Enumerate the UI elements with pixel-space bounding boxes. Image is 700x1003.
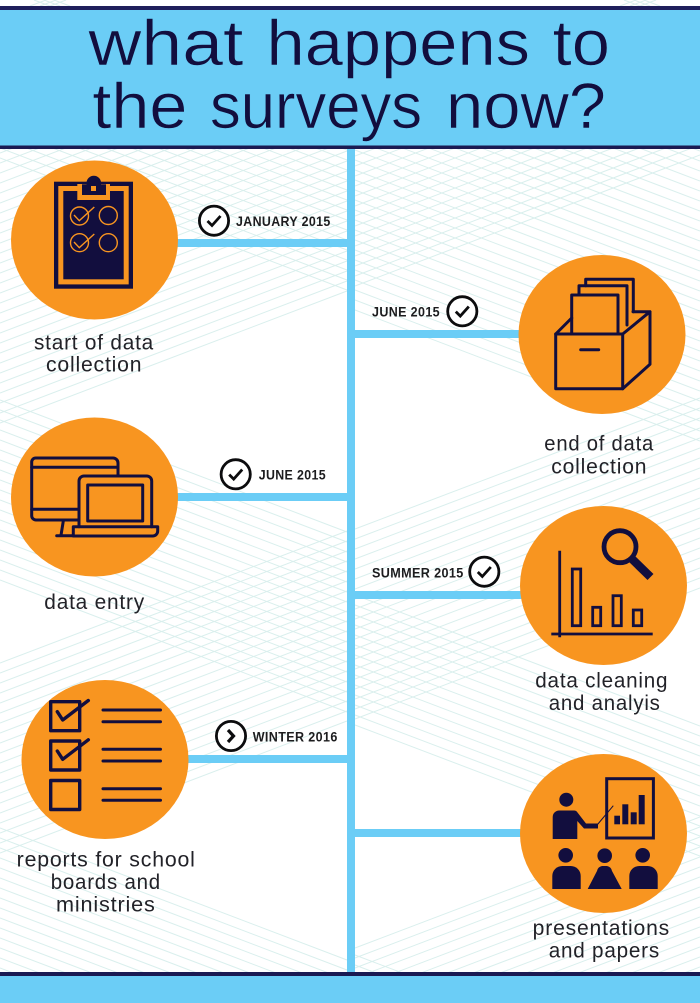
step: data cleaning and analysis	[520, 506, 687, 715]
title: to	[553, 7, 610, 79]
label	[533, 917, 670, 962]
label: end of data	[544, 433, 654, 456]
label: and analyis	[549, 692, 661, 715]
title banner	[0, 6, 700, 149]
label: collection	[46, 354, 142, 377]
icon: desktop and laptop	[32, 458, 158, 536]
step: data entry	[11, 418, 178, 614]
date: June 2015 right	[372, 297, 477, 326]
date: June 2015 right: JUNE 2015	[372, 305, 440, 320]
icon: file box	[556, 279, 650, 389]
date: June 2015 left	[221, 460, 326, 489]
title	[87, 7, 610, 142]
label: data entry	[44, 591, 145, 614]
step: reports for school boards and ministries	[17, 680, 196, 917]
label: start of data	[34, 331, 154, 354]
title: what	[87, 7, 244, 79]
label	[535, 669, 668, 715]
icon: checklist	[51, 700, 161, 810]
date: January 2015	[199, 206, 331, 235]
label: data cleaning	[535, 669, 668, 692]
label: boards and	[51, 871, 161, 894]
label: collection	[551, 455, 647, 478]
label: presentations	[533, 917, 670, 940]
date: June 2015 left: JUNE 2015	[259, 467, 326, 482]
title: happens	[266, 7, 530, 79]
title: surveys	[210, 70, 422, 142]
title: the	[92, 70, 187, 142]
date: Winter 2016: WINTER 2016	[253, 729, 338, 744]
step: start of data collection	[11, 160, 178, 377]
label	[17, 849, 196, 917]
label: reports for school	[17, 849, 196, 872]
label	[34, 331, 154, 377]
icon: bar chart and magnifier	[551, 531, 653, 637]
label	[544, 433, 654, 478]
date: Summer 2015	[372, 557, 499, 586]
icon: presenter and audience	[552, 779, 658, 889]
step: end of data collection	[518, 255, 686, 478]
label: ministries	[56, 894, 156, 917]
title: now?	[446, 70, 606, 142]
step: presentations and papers	[520, 754, 687, 962]
footer band	[0, 972, 700, 1003]
date: Winter 2016	[216, 721, 338, 751]
date: Summer 2015: SUMMER 2015	[372, 565, 464, 580]
label: and papers	[549, 939, 660, 962]
timeline: central line and branches	[175, 149, 522, 972]
date: January 2015: JANUARY 2015	[236, 214, 331, 229]
icon: clipboard	[54, 176, 133, 289]
